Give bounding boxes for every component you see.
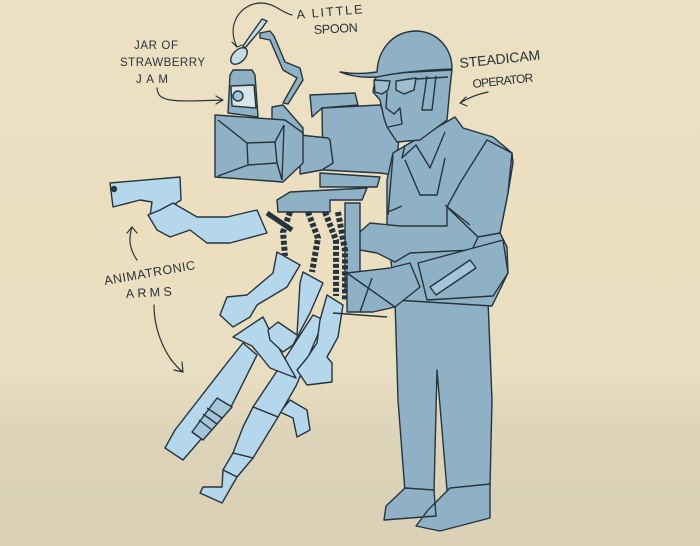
top arm and hand	[148, 203, 267, 243]
chains to lower arms	[283, 212, 345, 300]
camera body	[322, 105, 400, 175]
camera rig box	[347, 263, 420, 312]
label: steadicam operator: STEADICAM	[459, 47, 541, 71]
camera upper housing	[310, 93, 358, 117]
lower arm two	[268, 272, 323, 352]
label: a little spoon: SPOON	[313, 21, 358, 37]
label: jar of strawberry jam	[120, 40, 205, 86]
operator forearm and hand	[353, 207, 478, 262]
figure: operator	[110, 19, 513, 531]
belt and pouch	[418, 240, 508, 300]
chain to top arm	[267, 213, 292, 230]
label: animatronic arms: ARMS	[125, 285, 172, 301]
operator head	[373, 70, 452, 142]
mount post	[345, 203, 360, 290]
label: a little spoon	[296, 2, 363, 37]
operator hat	[340, 31, 452, 77]
pistol	[110, 177, 181, 232]
operator boots	[384, 484, 490, 531]
label: steadicam operator	[459, 47, 541, 91]
serrated blade	[233, 317, 296, 378]
lower arm three	[297, 295, 343, 385]
jam jar	[228, 70, 258, 117]
assault rifle	[200, 315, 324, 503]
label: jar of strawberry jam: STRAWBERRY	[120, 57, 205, 69]
arrows	[127, 3, 488, 372]
label: steadicam operator: OPERATOR	[472, 71, 534, 91]
spoon	[228, 19, 267, 67]
top box	[272, 105, 303, 136]
label: animatronic arms	[103, 258, 196, 301]
operator upper arm	[447, 140, 512, 237]
operator face lines	[386, 76, 470, 225]
shotgun	[165, 343, 257, 460]
belt strap	[430, 260, 476, 295]
label: jar of strawberry jam: JAM	[136, 74, 168, 86]
lower arm one	[220, 252, 300, 327]
spoon arm	[260, 31, 303, 104]
label: animatronic arms: ANIMATRONIC	[103, 258, 196, 288]
lens	[300, 135, 333, 174]
operator torso	[387, 117, 513, 306]
label: jar of strawberry jam: JAR OF	[134, 40, 178, 52]
operator sunglasses	[374, 77, 448, 94]
matte box	[215, 115, 303, 182]
operator legs	[395, 290, 492, 492]
label: a little spoon: A LITTLE	[296, 2, 363, 22]
camera mount	[277, 173, 380, 212]
